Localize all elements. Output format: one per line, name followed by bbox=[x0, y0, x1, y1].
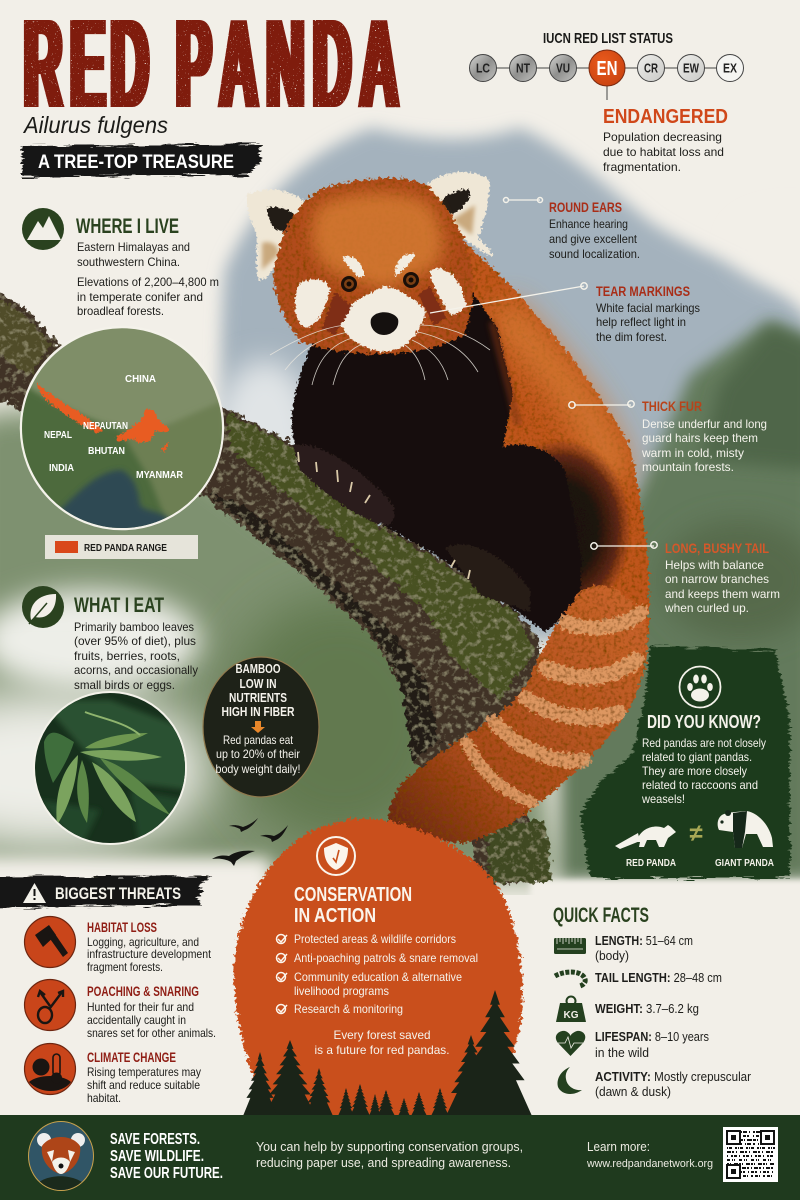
panda thigh shading bbox=[496, 428, 640, 612]
EX bbox=[716, 54, 744, 82]
whiskers bbox=[270, 325, 490, 385]
panel: conservation in action bbox=[234, 818, 523, 1118]
fact: activity bbox=[558, 1067, 751, 1099]
birds bbox=[212, 818, 288, 866]
callout: long bushy tail: and keeps them warm bbox=[665, 587, 780, 601]
icon: kg weight bbox=[556, 996, 586, 1022]
panel: did you know: related to giant pandas. bbox=[642, 750, 752, 764]
threat: climate change: CLIMATE CHANGE bbox=[87, 1050, 176, 1065]
threat: habitat loss: Logging, agriculture, and bbox=[87, 935, 199, 949]
icon: moon bbox=[558, 1067, 582, 1094]
callout: tear markings: TEAR MARKINGS bbox=[596, 284, 690, 299]
range map: CHINA bbox=[125, 373, 156, 385]
EW: EW bbox=[683, 60, 700, 76]
panel: where I live: southwestern China. bbox=[77, 255, 180, 269]
range map: INDIA bbox=[49, 462, 74, 474]
callout: tear markings: White facial markings bbox=[596, 301, 700, 315]
fact: length: (body) bbox=[595, 949, 629, 963]
callout: round ears: and give excellent bbox=[549, 232, 638, 246]
heading: DID YOU KNOW? bbox=[647, 711, 761, 732]
callout: thick fur: Dense underfur and long bbox=[642, 417, 767, 431]
callout: bamboo nutrition: body weight daily! bbox=[216, 762, 300, 776]
panel: what I eat: acorns, and occasionally bbox=[74, 663, 198, 677]
icon: thermometer and globe bbox=[24, 1044, 76, 1094]
panda right ear bbox=[423, 172, 493, 258]
action list: Research & monitoring bbox=[294, 1002, 403, 1016]
threat: climate change: habitat. bbox=[87, 1091, 121, 1105]
CR: CR bbox=[644, 60, 658, 76]
threat: habitat loss bbox=[24, 916, 212, 974]
call to action: You can help by supporting conservation groups, bbox=[256, 1139, 523, 1154]
QR code bbox=[723, 1127, 778, 1182]
endangered status: fragmentation. bbox=[603, 160, 681, 174]
panel: conservation in action: IN ACTION bbox=[294, 905, 376, 927]
callout: long bushy tail bbox=[591, 541, 780, 615]
EN highlighted: EN bbox=[596, 58, 618, 80]
callout: bamboo nutrition: up to 20% of their bbox=[216, 747, 300, 761]
panel: did you know: RED PANDA bbox=[626, 858, 676, 869]
callout: tear markings: help reflect light in bbox=[596, 315, 686, 329]
threat: poaching: POACHING & SNARING bbox=[87, 984, 199, 999]
threats banner: BIGGEST THREATS bbox=[55, 884, 181, 903]
closing message: Every forest saved bbox=[334, 1028, 430, 1042]
EN highlighted bbox=[589, 50, 625, 86]
panda dark body bbox=[292, 290, 582, 632]
IUCN status scale bbox=[470, 30, 744, 100]
tree branch bbox=[0, 278, 552, 884]
panda nose bbox=[371, 312, 398, 335]
callout: bamboo nutrition: LOW IN bbox=[240, 676, 276, 691]
range map: BHUTAN bbox=[88, 445, 125, 457]
illustration: red panda bbox=[247, 172, 649, 843]
threat: climate change: shift and reduce suitable bbox=[87, 1078, 200, 1092]
LC: LC bbox=[476, 60, 490, 76]
panel: did you know: They are more closely bbox=[642, 764, 747, 778]
panel: where I live bbox=[22, 208, 219, 318]
VU: VU bbox=[556, 60, 570, 76]
range map: MYANMAR bbox=[136, 469, 183, 481]
threat: climate change: Rising temperatures may bbox=[87, 1065, 201, 1079]
learn more bbox=[586, 1139, 713, 1170]
callout: long bushy tail: LONG, BUSHY TAIL bbox=[665, 541, 769, 556]
callout: round ears: ROUND EARS bbox=[549, 200, 622, 215]
callout: bamboo nutrition: Red pandas eat bbox=[223, 733, 294, 747]
scientific name: Ailurus fulgens bbox=[22, 112, 168, 138]
icon: shield bbox=[317, 837, 355, 875]
panel: what I eat: small birds or eggs. bbox=[74, 678, 175, 692]
call to action: reducing paper use, and spreading awareness. bbox=[256, 1155, 511, 1170]
callout: thick fur: warm in cold, misty bbox=[641, 446, 744, 460]
slogan bbox=[110, 1131, 223, 1182]
call to action bbox=[256, 1139, 523, 1170]
callout: thick fur: THICK FUR bbox=[642, 399, 702, 414]
closing message: is a future for red pandas. bbox=[314, 1043, 450, 1057]
callout: thick fur bbox=[569, 399, 767, 474]
callout: long bushy tail: when curled up. bbox=[664, 601, 749, 615]
callout: round ears: sound localization. bbox=[549, 247, 640, 261]
endangered status bbox=[603, 106, 728, 174]
panda head bbox=[274, 178, 474, 354]
action list: Protected areas & wildlife corridors bbox=[294, 932, 456, 946]
endangered status: ENDANGERED bbox=[603, 106, 728, 128]
heading: what I eat: WHAT I EAT bbox=[74, 594, 164, 617]
learn more: Learn more: bbox=[587, 1139, 650, 1154]
icon: axe bbox=[24, 916, 76, 968]
callout: thick fur: mountain forests. bbox=[642, 460, 734, 474]
threat: habitat loss: fragment forests. bbox=[87, 960, 163, 974]
EW bbox=[678, 54, 704, 82]
footer band bbox=[0, 1115, 800, 1200]
fact: lifespan bbox=[556, 1030, 709, 1060]
fact: tail length bbox=[555, 971, 722, 986]
heading: CONSERVATION bbox=[294, 884, 412, 906]
not equal sign: ≠ bbox=[689, 820, 703, 847]
subtitle banner bbox=[22, 144, 264, 177]
panda left ear bbox=[247, 190, 313, 280]
range map bbox=[15, 327, 225, 540]
slogan: SAVE WILDLIFE. bbox=[110, 1148, 204, 1165]
callout: bamboo nutrition: BAMBOO bbox=[236, 661, 280, 676]
map legend bbox=[45, 535, 198, 559]
panda tail bbox=[387, 585, 648, 843]
panel: what I eat bbox=[22, 586, 198, 692]
threat: poaching: snares set for other animals. bbox=[87, 1026, 216, 1040]
fact: lifespan: LIFESPAN: 8–10 years bbox=[595, 1030, 709, 1044]
heading: QUICK FACTS bbox=[553, 904, 649, 927]
panda orange back bbox=[450, 235, 649, 640]
red panda range bbox=[36, 381, 169, 452]
fact: lifespan: in the wild bbox=[595, 1046, 649, 1060]
icon: heart bbox=[556, 1031, 585, 1056]
icon: kg weight: KG bbox=[564, 1010, 579, 1021]
callout: long bushy tail: Helps with balance bbox=[665, 558, 764, 572]
endangered status: due to habitat loss and bbox=[603, 145, 724, 159]
fact: weight bbox=[556, 996, 699, 1022]
callout: bamboo nutrition: HIGH IN FIBER bbox=[222, 704, 295, 719]
panel: where I live: Elevations of 2,200–4,800 m bbox=[77, 275, 219, 289]
fact: activity: ACTIVITY: Mostly crepuscular bbox=[595, 1070, 751, 1084]
threat: poaching: Hunted for their fur and bbox=[87, 1000, 194, 1014]
NT bbox=[510, 54, 536, 82]
icon: red panda silhouette bbox=[615, 825, 676, 849]
threat: poaching: accidentally caught in bbox=[87, 1013, 186, 1027]
threat: poaching bbox=[24, 980, 216, 1040]
callout: bamboo nutrition bbox=[203, 657, 319, 797]
panel: did you know: Red pandas are not closely bbox=[642, 736, 766, 750]
EX: EX bbox=[723, 60, 737, 76]
panda front paws bbox=[293, 444, 530, 612]
callout: tear markings bbox=[430, 283, 700, 344]
learn more: www.redpandanetwork.org bbox=[586, 1158, 713, 1170]
slogan: SAVE OUR FUTURE. bbox=[110, 1165, 223, 1182]
callout: tear markings: the dim forest. bbox=[596, 330, 667, 344]
action list: livelihood programs bbox=[294, 984, 389, 998]
panda eyes bbox=[341, 276, 357, 292]
fact: activity: (dawn & dusk) bbox=[595, 1085, 671, 1099]
pine tree silhouettes bbox=[243, 990, 532, 1116]
threats banner bbox=[0, 876, 212, 908]
range map: NEPAL bbox=[44, 429, 72, 441]
panel: where I live: Eastern Himalayas and bbox=[77, 240, 190, 254]
heading: where I live: WHERE I LIVE bbox=[76, 215, 179, 238]
subtitle banner: A TREE-TOP TREASURE bbox=[38, 152, 234, 173]
fact: length bbox=[554, 934, 693, 963]
action list bbox=[276, 932, 478, 1016]
range map: NEPAUTAN bbox=[83, 420, 128, 432]
closing message bbox=[314, 1028, 450, 1057]
icon: tail bbox=[555, 972, 585, 986]
callout: round ears bbox=[504, 198, 640, 261]
icon: giant panda silhouette bbox=[718, 810, 773, 848]
VU bbox=[550, 54, 576, 82]
badge: red panda portrait bbox=[28, 1121, 94, 1191]
threat: habitat loss: infrastructure development bbox=[87, 947, 212, 961]
icon: down arrow bbox=[251, 721, 265, 733]
slogan: SAVE FORESTS. bbox=[110, 1131, 200, 1148]
fact: weight: WEIGHT: 3.7–6.2 kg bbox=[595, 1002, 699, 1016]
panel: did you know bbox=[580, 646, 790, 878]
panel: where I live: broadleaf forests. bbox=[77, 304, 164, 318]
panel: what I eat: fruits, berries, roots, bbox=[74, 649, 180, 663]
panel: what I eat: Primarily bamboo leaves bbox=[74, 620, 194, 634]
icon: snare bbox=[24, 980, 76, 1030]
endangered status: Population decreasing bbox=[603, 130, 722, 144]
face markings bbox=[295, 253, 466, 352]
panel: did you know: related to raccoons and bbox=[642, 778, 758, 792]
NT: NT bbox=[516, 60, 530, 76]
callout: bamboo nutrition: NUTRIENTS bbox=[229, 690, 287, 705]
icon: ruler bbox=[554, 938, 586, 954]
icon: mountains bbox=[22, 208, 64, 250]
icon: paw print bbox=[680, 666, 720, 708]
threat: habitat loss: HABITAT LOSS bbox=[87, 920, 157, 935]
panel: what I eat: (over 95% of diet), plus bbox=[74, 634, 196, 648]
action list: Community education & alternative bbox=[294, 970, 462, 984]
panel: where I live: in temperate conifer and bbox=[77, 290, 203, 304]
panel: did you know: GIANT PANDA bbox=[715, 858, 774, 869]
scale heading: IUCN RED LIST STATUS bbox=[543, 30, 673, 47]
map legend: RED PANDA RANGE bbox=[84, 543, 167, 554]
CR bbox=[638, 54, 664, 82]
panel: biggest threats bbox=[0, 876, 216, 1105]
fact: length: LENGTH: 51–64 cm bbox=[595, 934, 693, 948]
callout: round ears: Enhance hearing bbox=[549, 217, 628, 231]
callout: long bushy tail: on narrow branches bbox=[665, 572, 769, 586]
panel: quick facts bbox=[553, 904, 751, 1099]
panel: did you know: weasels! bbox=[641, 792, 685, 806]
LC bbox=[470, 54, 496, 82]
action list: Anti-poaching patrols & snare removal bbox=[294, 951, 478, 965]
bamboo photo bbox=[34, 692, 190, 850]
callout: thick fur: guard hairs keep them bbox=[642, 431, 758, 445]
fact: tail length: TAIL LENGTH: 28–48 cm bbox=[595, 971, 722, 985]
icon: leaf bbox=[22, 586, 64, 628]
threat: climate change bbox=[24, 1044, 201, 1105]
